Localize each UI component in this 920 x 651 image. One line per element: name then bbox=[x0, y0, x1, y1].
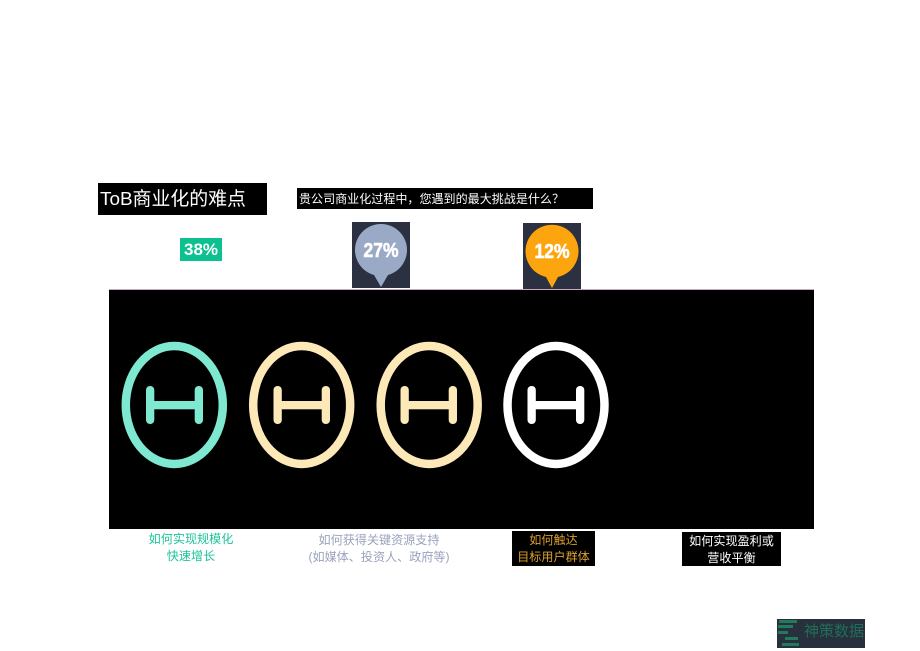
caption: profit balance bbox=[682, 532, 781, 566]
caption: scale growth: 如何实现规模化 bbox=[149, 532, 233, 546]
title bbox=[98, 183, 267, 215]
stat bubble: 12%: 12% bbox=[534, 241, 570, 263]
caption: profit balance: 如何实现盈利或 bbox=[689, 534, 774, 548]
icon: cream ring two bbox=[381, 346, 478, 464]
icon: teal ring bbox=[126, 346, 223, 464]
caption: key resources: 如何获得关键资源支持 bbox=[319, 533, 439, 547]
caption: key resources: (如媒体、投资人、政府等) bbox=[308, 550, 450, 564]
logo: 神策数据 bbox=[804, 623, 864, 640]
title: ToB商业化的难点 bbox=[100, 189, 246, 210]
stat bubble: 27% bbox=[352, 222, 410, 288]
caption: key resources bbox=[308, 533, 450, 564]
caption: reach target users: 目标用户群体 bbox=[517, 550, 590, 564]
stat badge: 38%: 38% bbox=[184, 240, 218, 259]
stat bubble: 27%: 27% bbox=[364, 240, 399, 262]
caption: reach target users bbox=[512, 531, 595, 566]
caption: profit balance: 营收平衡 bbox=[707, 551, 756, 565]
icon: white ring bbox=[508, 346, 604, 464]
caption: scale growth: 快速增长 bbox=[167, 548, 215, 562]
survey question: 贵公司商业化过程中，您遇到的最大挑战是什么？ bbox=[299, 192, 564, 206]
stat badge: 38% bbox=[180, 238, 222, 261]
caption: scale growth bbox=[149, 532, 233, 562]
survey question bbox=[297, 188, 593, 209]
icon: cream ring one bbox=[253, 346, 350, 464]
panel: black icon band bbox=[109, 289, 814, 529]
stat bubble: 12% bbox=[523, 223, 581, 289]
logo bbox=[777, 619, 865, 648]
caption: reach target users: 如何触达 bbox=[529, 533, 578, 547]
